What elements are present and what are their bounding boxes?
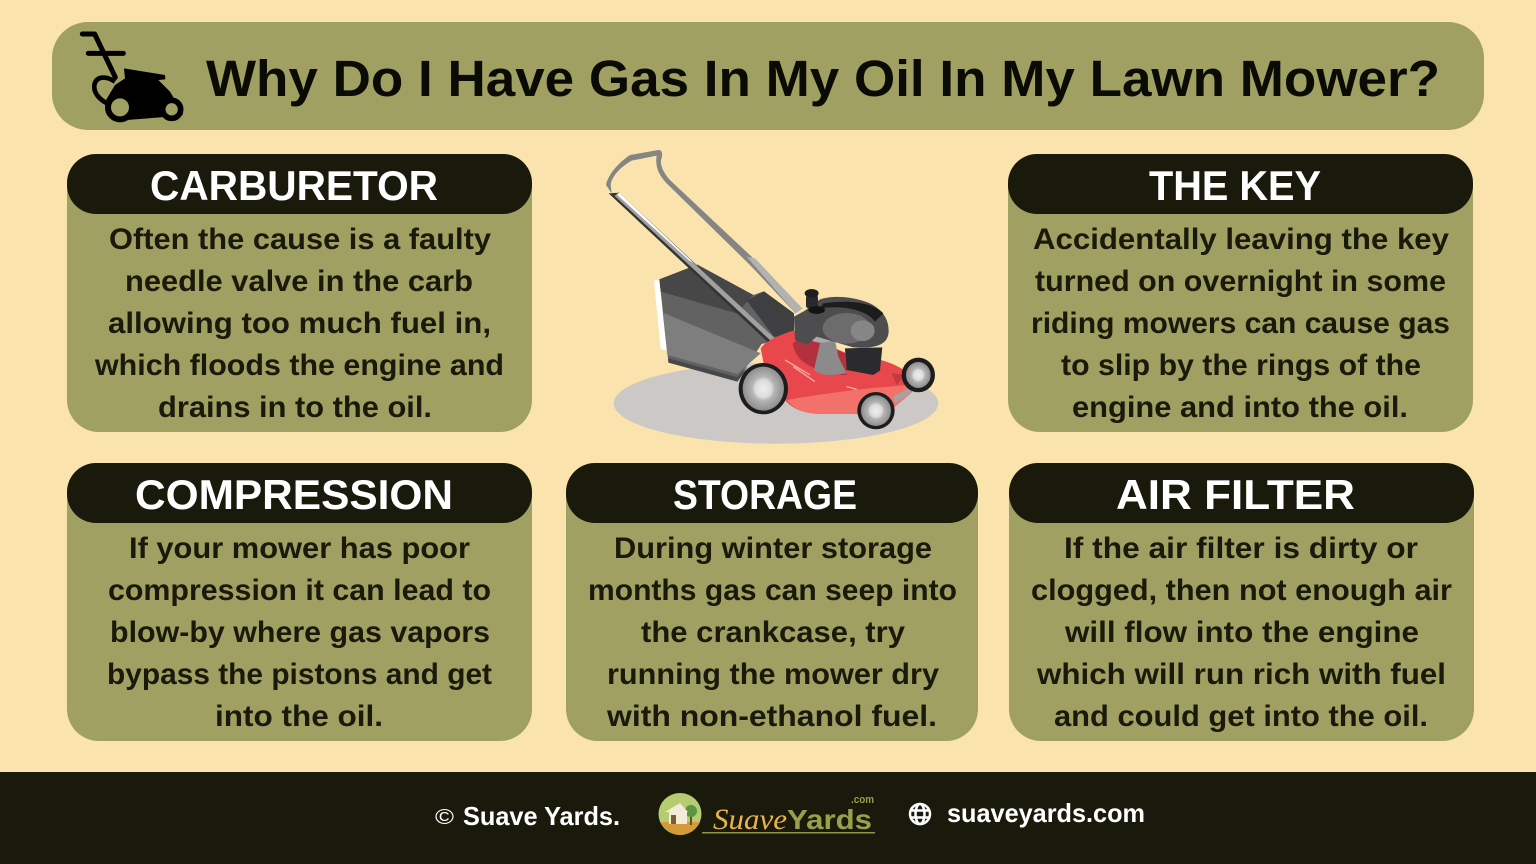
icon: lawn mower silhouette bbox=[82, 34, 183, 120]
text: the key body: engine and into the oil. bbox=[1072, 391, 1408, 424]
text: air filter body bbox=[1031, 532, 1452, 733]
copyright: Suave Yards. bbox=[463, 801, 620, 831]
text: carburetor body: Often the cause is a faulty bbox=[109, 223, 491, 256]
text: carburetor body bbox=[94, 223, 504, 424]
logo: Suave Yards: Yards bbox=[787, 804, 872, 835]
logo: Suave Yards: Suave bbox=[713, 803, 787, 836]
text: storage body: During winter storage bbox=[614, 532, 932, 565]
text: air filter body: clogged, then not enough air bbox=[1031, 574, 1452, 607]
website: suaveyards.com bbox=[947, 798, 1145, 828]
heading: the key bbox=[1008, 154, 1473, 214]
panel: carburetor bbox=[67, 154, 532, 432]
heading: air filter: AIR FILTER bbox=[1116, 471, 1355, 518]
near handle bbox=[609, 193, 777, 347]
text: compression body: bypass the pistons and get bbox=[107, 658, 492, 691]
text: compression body: If your mower has poor bbox=[129, 532, 470, 565]
heading: compression: COMPRESSION bbox=[135, 471, 453, 518]
panel: storage bbox=[566, 463, 978, 741]
text: the key body: Accidentally leaving the key bbox=[1033, 223, 1449, 256]
text: compression body: blow-by where gas vapors bbox=[110, 616, 490, 649]
footer bar bbox=[0, 772, 1536, 864]
text: air filter body: which will run rich with fuel bbox=[1036, 658, 1446, 691]
text: air filter body: If the air filter is dirty or bbox=[1064, 532, 1418, 565]
text: the key body: riding mowers can cause gas bbox=[1031, 307, 1450, 340]
far handle bbox=[606, 150, 802, 313]
wheels bbox=[902, 358, 935, 392]
text: compression body bbox=[107, 532, 492, 733]
text: storage body: months gas can seep into bbox=[588, 574, 957, 607]
heading: storage: STORAGE bbox=[673, 471, 857, 518]
grass bag bbox=[659, 265, 794, 381]
heading: storage bbox=[566, 463, 978, 523]
panel: the key bbox=[1008, 154, 1473, 432]
logo: Suave Yards bbox=[658, 793, 875, 836]
text: air filter body: and could get into the oil. bbox=[1054, 700, 1428, 733]
text: air filter body: will flow into the engine bbox=[1064, 616, 1419, 649]
text: the key body: to slip by the rings of the bbox=[1061, 349, 1421, 382]
heading: carburetor bbox=[67, 154, 532, 214]
heading: air filter bbox=[1009, 463, 1474, 523]
panel: compression bbox=[67, 463, 532, 741]
text: storage body: running the mower dry bbox=[607, 658, 939, 691]
text: compression body: compression it can lead to bbox=[108, 574, 491, 607]
text: carburetor body: which floods the engine and bbox=[94, 349, 504, 382]
text: storage body: the crankcase, try bbox=[641, 616, 905, 649]
text: carburetor body: allowing too much fuel in, bbox=[108, 307, 491, 340]
title banner bbox=[52, 22, 1484, 130]
panel: air filter bbox=[1009, 463, 1474, 741]
heading: the key: THE KEY bbox=[1149, 162, 1321, 209]
heading: carburetor: CARBURETOR bbox=[150, 162, 438, 209]
logo: Suave Yards: .com bbox=[851, 794, 874, 806]
illustration: red lawn mower bbox=[606, 150, 938, 444]
title text: Why Do I Have Gas In My Oil In My Lawn Mower? bbox=[206, 50, 1440, 107]
text: the key body bbox=[1031, 223, 1450, 424]
engine bbox=[814, 340, 847, 375]
text: carburetor body: needle valve in the carb bbox=[125, 265, 473, 298]
red deck bbox=[761, 331, 914, 414]
heading: compression bbox=[67, 463, 532, 523]
text: the key body: turned on overnight in some bbox=[1035, 265, 1446, 298]
icon: globe bbox=[910, 804, 930, 824]
text: storage body: with non-ethanol fuel. bbox=[606, 700, 937, 733]
text: storage body bbox=[588, 532, 957, 733]
copyright: © bbox=[435, 806, 455, 829]
text: compression body: into the oil. bbox=[215, 700, 383, 733]
text: carburetor body: drains in to the oil. bbox=[158, 391, 432, 424]
